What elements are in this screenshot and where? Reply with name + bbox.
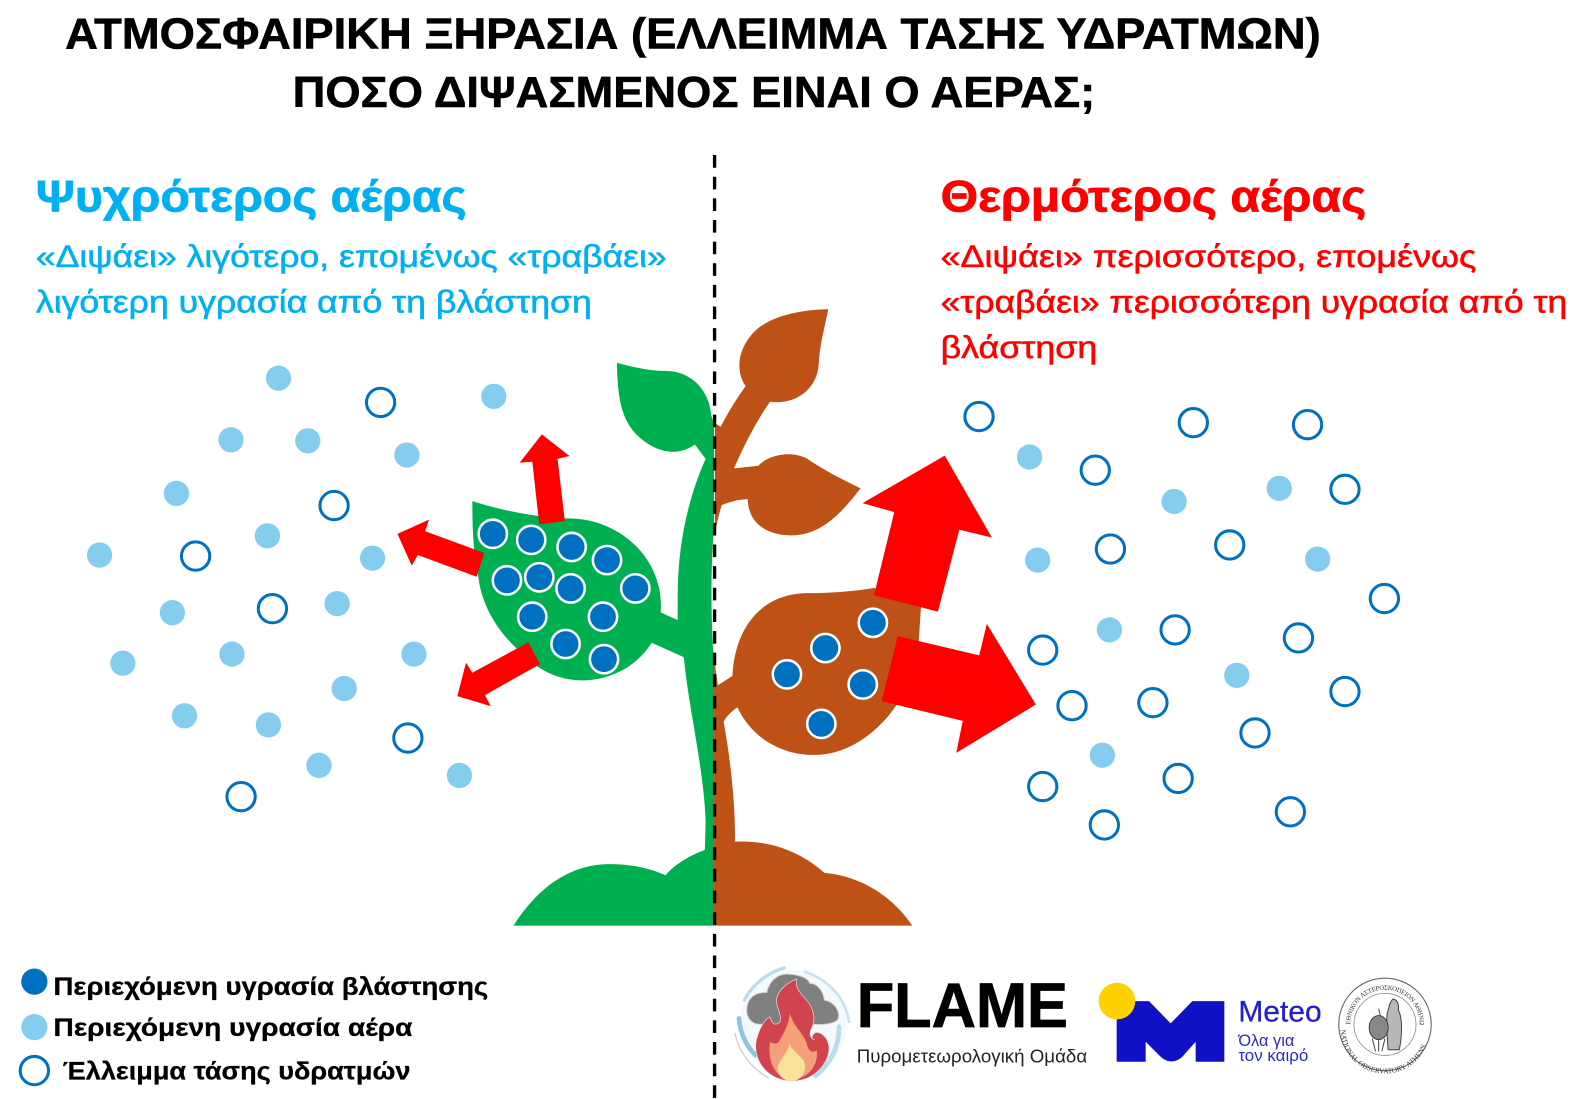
arrow: small left bbox=[397, 520, 484, 577]
arrow: small up bbox=[520, 434, 569, 524]
wordmark: FLAME: FLAME bbox=[857, 971, 1068, 1041]
text block: warmer air description: βλάστηση bbox=[941, 330, 1097, 365]
chart: cool air moisture particles bbox=[87, 366, 506, 811]
wordmark: Meteo: Meteo bbox=[1238, 996, 1322, 1029]
arrow: big right bbox=[882, 624, 1036, 753]
heading: warmer air: Θερμότερος αέρας bbox=[941, 172, 1366, 221]
text block: cooler air description: λιγότερη υγρασία από τη βλάστηση bbox=[36, 284, 592, 319]
legend item: air moisture: Περιεχόμενη υγρασία αέρα bbox=[54, 1014, 413, 1042]
icon: Meteo sun bbox=[1099, 983, 1135, 1019]
logo: National Observatory of Athens seal bbox=[1338, 978, 1432, 1074]
arrow: small lower left bbox=[457, 642, 540, 706]
text block: cooler air description: «Διψάει» λιγότερο, επομένως «τραβάει» bbox=[36, 239, 667, 274]
icon: Meteo M mark bbox=[1117, 1001, 1224, 1062]
chart: moisture in green leaf bbox=[479, 520, 649, 673]
tagline: Meteo bbox=[1237, 1031, 1308, 1065]
logo: FLAME bbox=[735, 968, 1087, 1081]
title: ΑΤΜΟΣΦΑΙΡΙΚΗ ΞΗΡΑΣΙΑ (ΕΛΛΕΙΜΜΑ ΤΑΣΗΣ ΥΔΡΑΤΜΩΝ) bbox=[65, 11, 1321, 59]
text block: warmer air description bbox=[941, 239, 1567, 365]
icon: plant green half bbox=[472, 363, 714, 926]
tagline: Meteo: Όλα για bbox=[1237, 1031, 1295, 1050]
logo: National Observatory of Athens seal: NATIONAL OBSERVATORY ATHENS bbox=[1340, 1030, 1426, 1074]
legend bbox=[20, 969, 488, 1086]
icon: plant brown half bbox=[714, 309, 921, 926]
text block: cooler air description bbox=[36, 239, 667, 319]
tagline: Meteo: τον καιρό bbox=[1238, 1046, 1308, 1065]
panel: cooler air text bbox=[36, 172, 667, 319]
text block: warmer air description: «τραβάει» περισσότερη υγρασία από τη bbox=[941, 284, 1567, 319]
legend item: vegetation moisture: Περιεχόμενη υγρασία βλάστησης bbox=[54, 973, 488, 1001]
title bbox=[65, 11, 1321, 117]
chart: warm air moisture particles bbox=[965, 402, 1399, 839]
text block: warmer air description: «Διψάει» περισσότερο, επομένως bbox=[941, 239, 1476, 274]
title: ΠΟΣΟ ΔΙΨΑΣΜΕΝΟΣ ΕΙΝΑΙ Ο ΑΕΡΑΣ; bbox=[293, 69, 1095, 117]
legend item: vapour pressure deficit: Έλλειμμα τάσης υδρατμών bbox=[63, 1058, 410, 1086]
chart: moisture in brown leaf bbox=[773, 609, 887, 738]
panel: warmer air text bbox=[941, 172, 1567, 365]
logo: Meteo bbox=[1099, 983, 1322, 1065]
icon: FLAME swirl, cloud and flame bbox=[735, 968, 849, 1081]
tagline: FLAME: Πυρομετεωρολογική Ομάδα bbox=[857, 1046, 1087, 1067]
logo: National Observatory of Athens seal: ΕΘΝΙΚΟΝ ΑΣΤΕΡΟΣΚΟΠΕΙΟΝ ΑΘΗΝΩΝ bbox=[1346, 985, 1424, 1025]
arrow: big up bbox=[863, 456, 992, 612]
heading: cooler air: Ψυχρότερος αέρας bbox=[36, 172, 467, 221]
